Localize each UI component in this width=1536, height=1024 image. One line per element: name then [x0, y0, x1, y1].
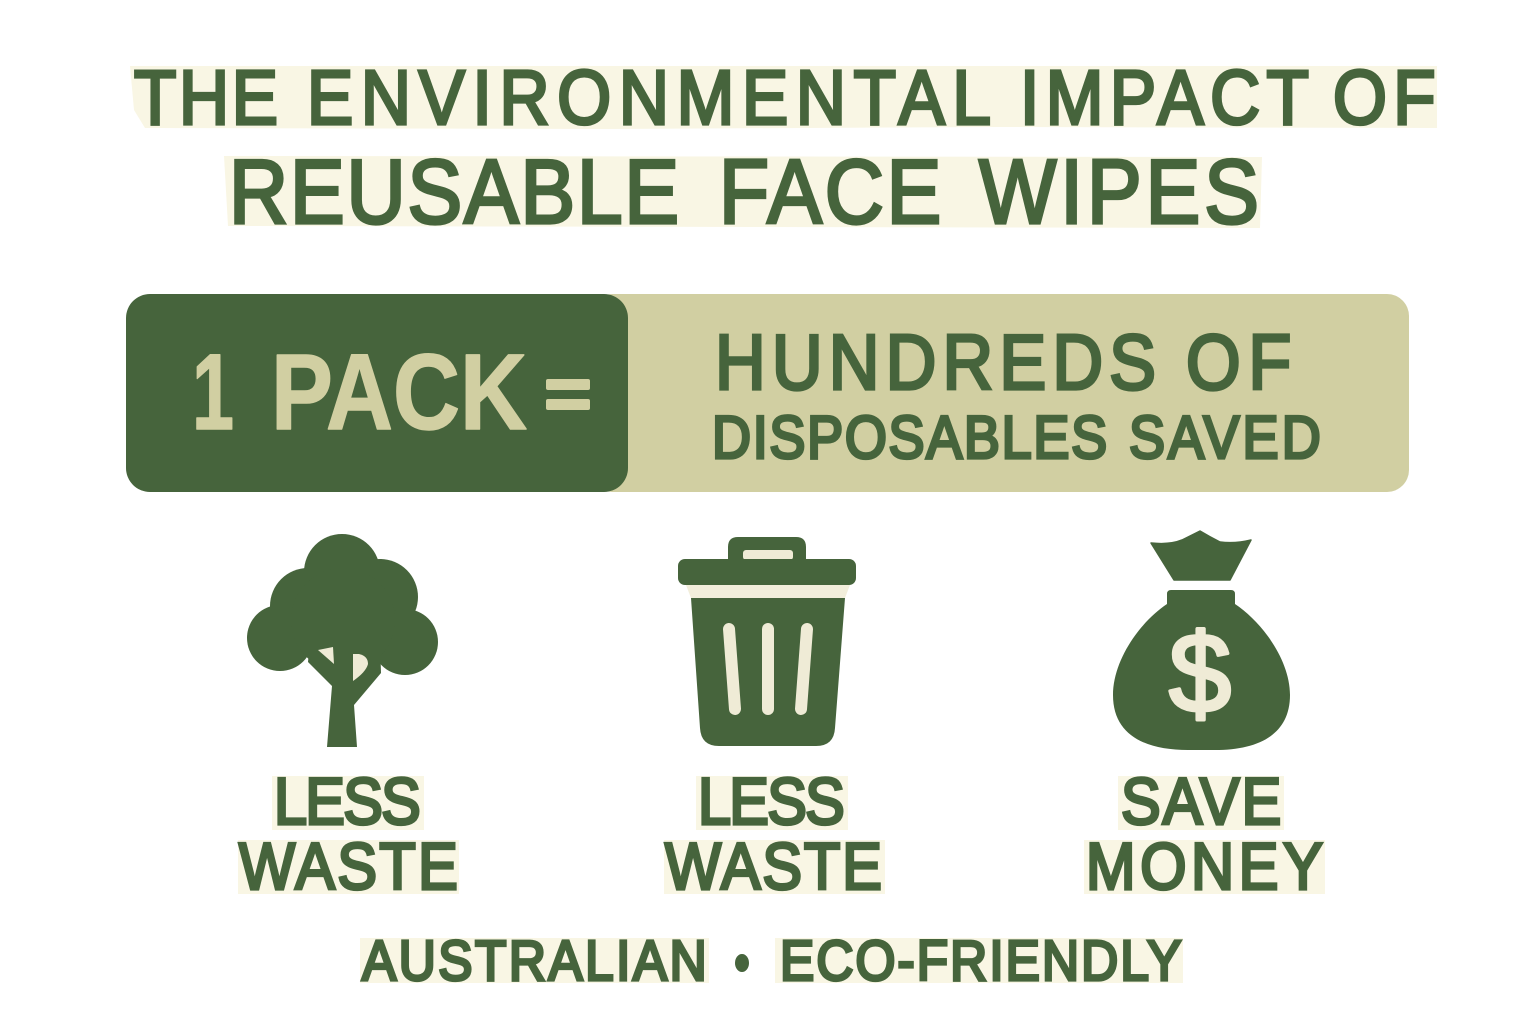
- footer: ECO-FRIENDLY: [780, 930, 1181, 993]
- icon: money bag: $: [1169, 611, 1231, 736]
- footer: [360, 930, 1183, 993]
- label: save money: [1084, 765, 1325, 904]
- icon: tree: [247, 534, 438, 747]
- label: less waste 1: WASTE: [239, 830, 458, 904]
- 1 pack equals: 1: [192, 331, 234, 452]
- label: less waste 2: LESS: [698, 765, 845, 839]
- title: REUSABLE: [229, 142, 679, 243]
- title: OF: [1333, 55, 1436, 141]
- title: THE: [134, 55, 278, 141]
- hundreds of disposables saved: OF: [1186, 319, 1291, 406]
- title: ENVIRONMENTAL: [307, 55, 991, 141]
- hundreds of disposables saved: SAVED: [1129, 404, 1321, 472]
- title: WIPES: [979, 142, 1259, 243]
- title: IMPACT: [1020, 55, 1309, 141]
- label: less waste 1: LESS: [274, 765, 421, 839]
- icon: trash bin: [678, 537, 856, 746]
- label: less waste 2: WASTE: [665, 830, 882, 904]
- 1 pack equals: PACK: [271, 331, 527, 452]
- banner left panel: [126, 294, 628, 492]
- hundreds of disposables saved: DISPOSABLES: [712, 404, 1107, 472]
- title: FACE: [719, 142, 941, 243]
- label: less waste 2: [664, 765, 885, 904]
- title: [130, 55, 1437, 243]
- label: save money: MONEY: [1086, 830, 1323, 904]
- footer: AUSTRALIAN: [362, 930, 707, 993]
- banner: [126, 294, 1409, 492]
- icon: money bag: [1113, 531, 1290, 750]
- hundreds of disposables saved: HUNDREDS: [715, 319, 1156, 406]
- label: less waste 1: [238, 765, 459, 904]
- hundreds of disposables saved: [712, 319, 1321, 472]
- label: save money: SAVE: [1121, 765, 1281, 839]
